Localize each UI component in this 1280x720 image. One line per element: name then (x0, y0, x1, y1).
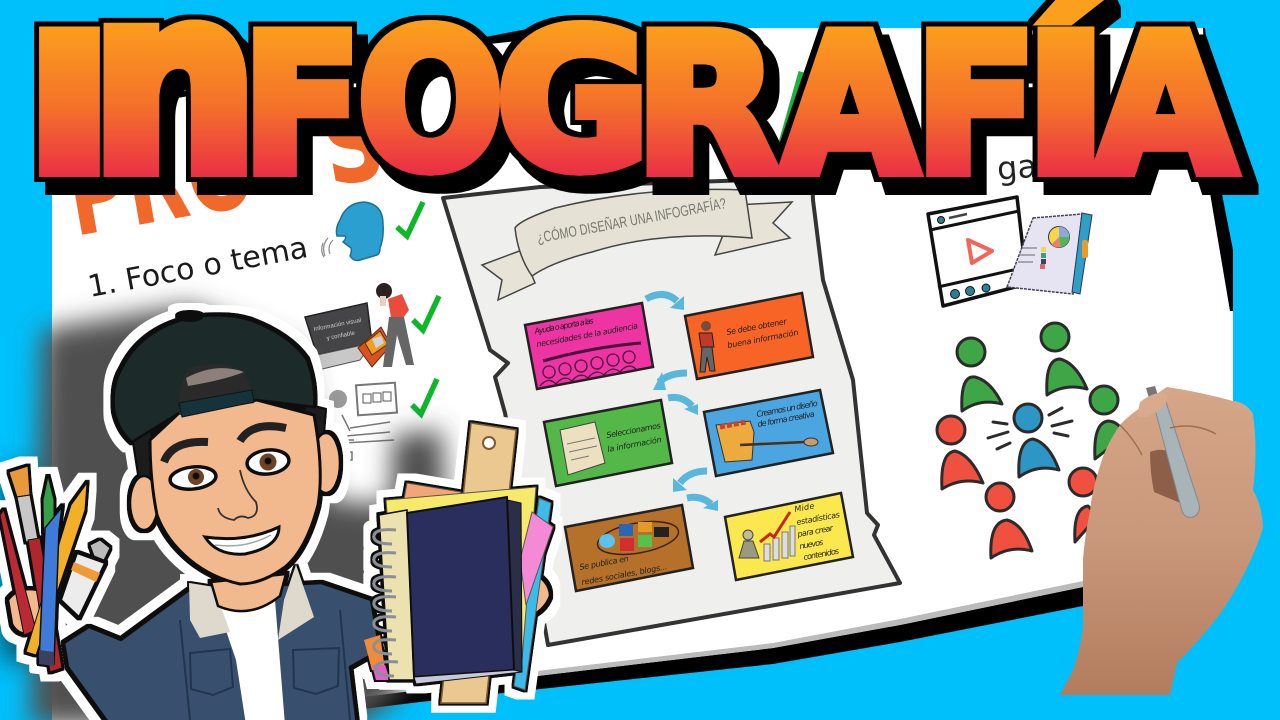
title: A (782, 0, 917, 217)
step: yellow box: contenidos (803, 547, 840, 562)
step: yellow box: Mide (794, 501, 815, 514)
icon: check mark (412, 379, 437, 414)
person: green right (1090, 386, 1126, 459)
title: F (243, 0, 361, 216)
arrows between steps (646, 294, 718, 511)
step: green box: la información (607, 434, 662, 454)
icon: laptop: Información visual (313, 318, 362, 333)
icon: stacked books (358, 327, 391, 367)
backwards cap (114, 312, 314, 442)
ear right (312, 433, 340, 493)
character: cartoon boy with art supplies (0, 312, 553, 720)
banner heading: ¿CÓMO DISEÑAR UNA INFOGRAFÍA? (536, 195, 728, 247)
character backdrop shadow (30, 305, 446, 720)
title: A (1096, 0, 1235, 216)
label: Foco o tema: 1. Foco o tema (85, 230, 311, 305)
person: blue centre (1014, 404, 1059, 477)
hair sides (133, 405, 325, 480)
person: red left (937, 416, 983, 489)
neck (211, 574, 286, 611)
title: R (635, 0, 779, 216)
fur collar left (189, 583, 230, 638)
step: orange box: buena información (727, 327, 799, 350)
step: blue box: Creamos un diseño (756, 399, 818, 419)
big background heading fragments: S (312, 74, 394, 213)
icon: check mark (397, 202, 423, 236)
step: brown box: redes sociales, blogs... (581, 562, 668, 587)
step: blue box: de forma creativa (757, 410, 815, 429)
step: green box: Seleccionamos (606, 421, 661, 440)
icon: laptop: y confiable (326, 330, 356, 342)
step: green box (544, 400, 672, 486)
icon: check mark (413, 296, 439, 330)
banner heading (482, 189, 792, 300)
body: denim jacket (64, 565, 380, 720)
icon: hand holding marker (1060, 386, 1263, 695)
title: F (916, 0, 1036, 217)
speech lines (988, 408, 1072, 449)
panel: how to design an infographic poster (443, 178, 900, 645)
icon: video player (928, 197, 1027, 306)
face (150, 400, 320, 584)
person: red bottom (986, 483, 1032, 558)
icon: paint brushes, pencils and tube (0, 466, 110, 672)
title: Í (1024, 0, 1108, 216)
step: pink box (525, 303, 653, 389)
heading fragment at right: gad (995, 145, 1059, 188)
list item: focus or topic (85, 202, 423, 305)
person: green top left (957, 338, 1002, 411)
person: red right (1069, 468, 1098, 542)
step: yellow box: estadísticas (796, 510, 841, 527)
palm shadow cavity (1150, 450, 1188, 506)
list item: visual information laptop (305, 283, 439, 370)
step: pink box: necesidades de la audiencia (536, 321, 639, 349)
step: orange box: Se debe obtener (726, 317, 788, 337)
icon: coloured paper stack (364, 483, 553, 690)
step: yellow box (725, 493, 853, 580)
background check mark fragment (768, 72, 802, 150)
title: I (25, 0, 114, 216)
step: pink box: Ayuda o aporta a las (533, 316, 594, 336)
step: blue box (704, 390, 833, 476)
hand left (8, 589, 42, 634)
step: yellow box: nuevos (799, 538, 824, 551)
step: orange box (685, 293, 813, 379)
fur collar right (278, 565, 314, 640)
network of people (937, 323, 1126, 558)
step: brown box (565, 505, 693, 591)
paper bottom edge shading (420, 581, 1083, 690)
step: brown box: Se publica en (579, 554, 630, 572)
ear left (130, 476, 158, 530)
list item: person at computer (326, 379, 437, 460)
title (25, 0, 1235, 229)
person: green top right (1041, 323, 1087, 395)
icon: speaking head (322, 202, 383, 260)
icon: dark spiral notebook (374, 497, 522, 684)
icon: report notebook with pie chart (1007, 213, 1092, 294)
big background heading fragments: PRO (57, 102, 264, 263)
shirt (218, 600, 285, 720)
icon: wooden ruler (441, 423, 516, 703)
icon: laptop (305, 303, 372, 370)
blue bit of paper edge shadow (0, 470, 50, 660)
person thinking (376, 283, 414, 367)
step: yellow box: para crear (796, 523, 834, 539)
hand right (526, 570, 550, 618)
